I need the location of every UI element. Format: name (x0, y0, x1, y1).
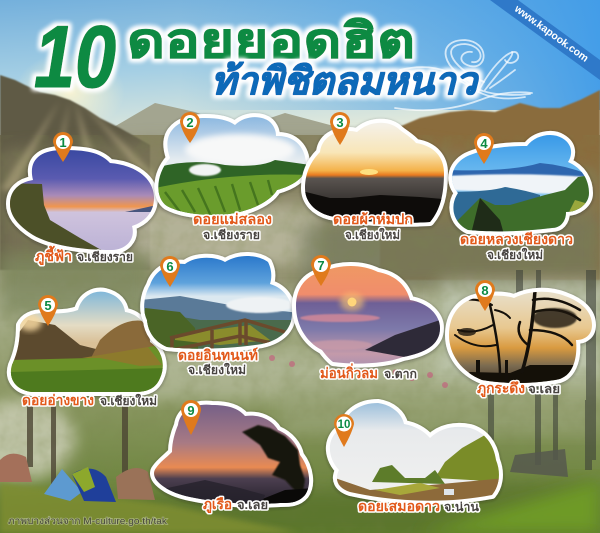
photo: sunrise over dark ridge (305, 122, 444, 223)
panel: 9 Phu Ruea (150, 398, 315, 513)
pin 10: 10 (338, 419, 350, 431)
label 8: ภูกระดึง (477, 380, 525, 397)
label 2 (193, 211, 272, 242)
label 8: จ.เลย (528, 382, 560, 396)
pin 5: 5 (44, 298, 52, 313)
label 3: ดอยผ้าห่มปก (333, 211, 413, 227)
photo: blue mountains and cloud sea (452, 135, 589, 232)
label 4: จ.เชียงใหม่ (487, 247, 543, 262)
credit line: ภาพบางส่วนจาก M-culture.go.th/tak (8, 516, 167, 527)
photo: dusk with pine silhouette (154, 404, 310, 504)
pin 9: 9 (187, 403, 195, 418)
label 2: จ.เชียงราย (203, 228, 260, 242)
photo: pine silhouettes at sunset (449, 292, 592, 383)
pin 3 (330, 112, 350, 145)
pin 7 (311, 255, 331, 286)
pin 5 (38, 295, 58, 326)
title: ดอยยอดฮิต (127, 15, 415, 68)
pin 7: 7 (317, 258, 325, 273)
label 4 (460, 231, 573, 262)
panel: 4 Doi Luang Chiang Dao (445, 128, 595, 262)
label 10: จ.น่าน (444, 500, 480, 514)
website ribbon (490, 0, 600, 80)
photo: hillside meadow in white mist (330, 403, 499, 501)
panel: 3 Doi Pha Hom Pok (298, 112, 453, 242)
panel: 8 Phu Kradueng (445, 280, 600, 397)
label 5 (22, 392, 157, 408)
label 10 (358, 498, 480, 514)
label 5: จ.เชียงใหม่ (100, 393, 157, 408)
pin 6: 6 (166, 259, 174, 274)
label 5: ดอยอ่างขาง (22, 392, 94, 408)
label 3 (333, 211, 413, 242)
label 3: จ.เชียงใหม่ (345, 227, 400, 242)
panel: 2 Doi Mae Salong (155, 110, 315, 242)
label 7: ม่อนกิ่วลม (320, 363, 378, 381)
panel: 1 Phu Chi Fa (0, 132, 165, 265)
tents camp (0, 449, 568, 502)
pin 4: 4 (480, 136, 488, 151)
label 6 (178, 347, 258, 377)
panel: 10 Doi Samer Dao (320, 396, 505, 514)
label 4: ดอยหลวงเชียงดาว (460, 231, 573, 247)
label 1: ภูชี้ฟ้า (35, 245, 72, 265)
pin 8: 8 (481, 283, 489, 298)
panel: 5 Doi Ang Khang (8, 285, 170, 408)
pin 4 (474, 133, 494, 164)
pin 8 (475, 280, 495, 311)
label 6: จ.เชียงใหม่ (188, 362, 246, 377)
wind swirl decoration (395, 40, 532, 110)
title: ท้าพิชิตลมหนาว (211, 61, 480, 103)
label 9 (203, 496, 268, 513)
photo: dawn above sea of mist (10, 150, 154, 250)
pin 3: 3 (336, 115, 344, 130)
pin 10 (334, 414, 354, 447)
label 7 (320, 363, 417, 381)
title (34, 7, 480, 106)
pin 1: 1 (59, 135, 67, 150)
pin 1 (53, 132, 73, 162)
pin 6 (160, 256, 180, 287)
label 9: จ.เลย (237, 498, 268, 512)
website ribbon: www.kapook.com (511, 2, 591, 65)
photo: terraced farm at sunset (10, 292, 163, 392)
title: 10 (34, 7, 116, 106)
label 1: จ.เชียงราย (77, 250, 133, 264)
pin 9 (181, 400, 201, 435)
label 8 (477, 380, 560, 397)
label 10: ดอยเสมอดาว (358, 498, 440, 514)
panel: 6 Doi Inthanon (140, 250, 300, 377)
pin 2: 2 (186, 115, 194, 130)
label 9: ภูเรือ (203, 496, 232, 513)
pin 2 (180, 112, 200, 143)
label 1 (35, 245, 133, 265)
photo: viewpoint with wooden fence (144, 256, 292, 349)
photo: orange sunset and misty hills (296, 266, 440, 364)
label 2: ดอยแม่สลอง (193, 211, 272, 227)
panel: 7 Mon Kiu Lom (290, 255, 445, 381)
label 6: ดอยอินทนนท์ (178, 347, 258, 363)
label 7: จ.ตาก (384, 367, 417, 381)
photo: tea fields under cloud (158, 117, 306, 215)
